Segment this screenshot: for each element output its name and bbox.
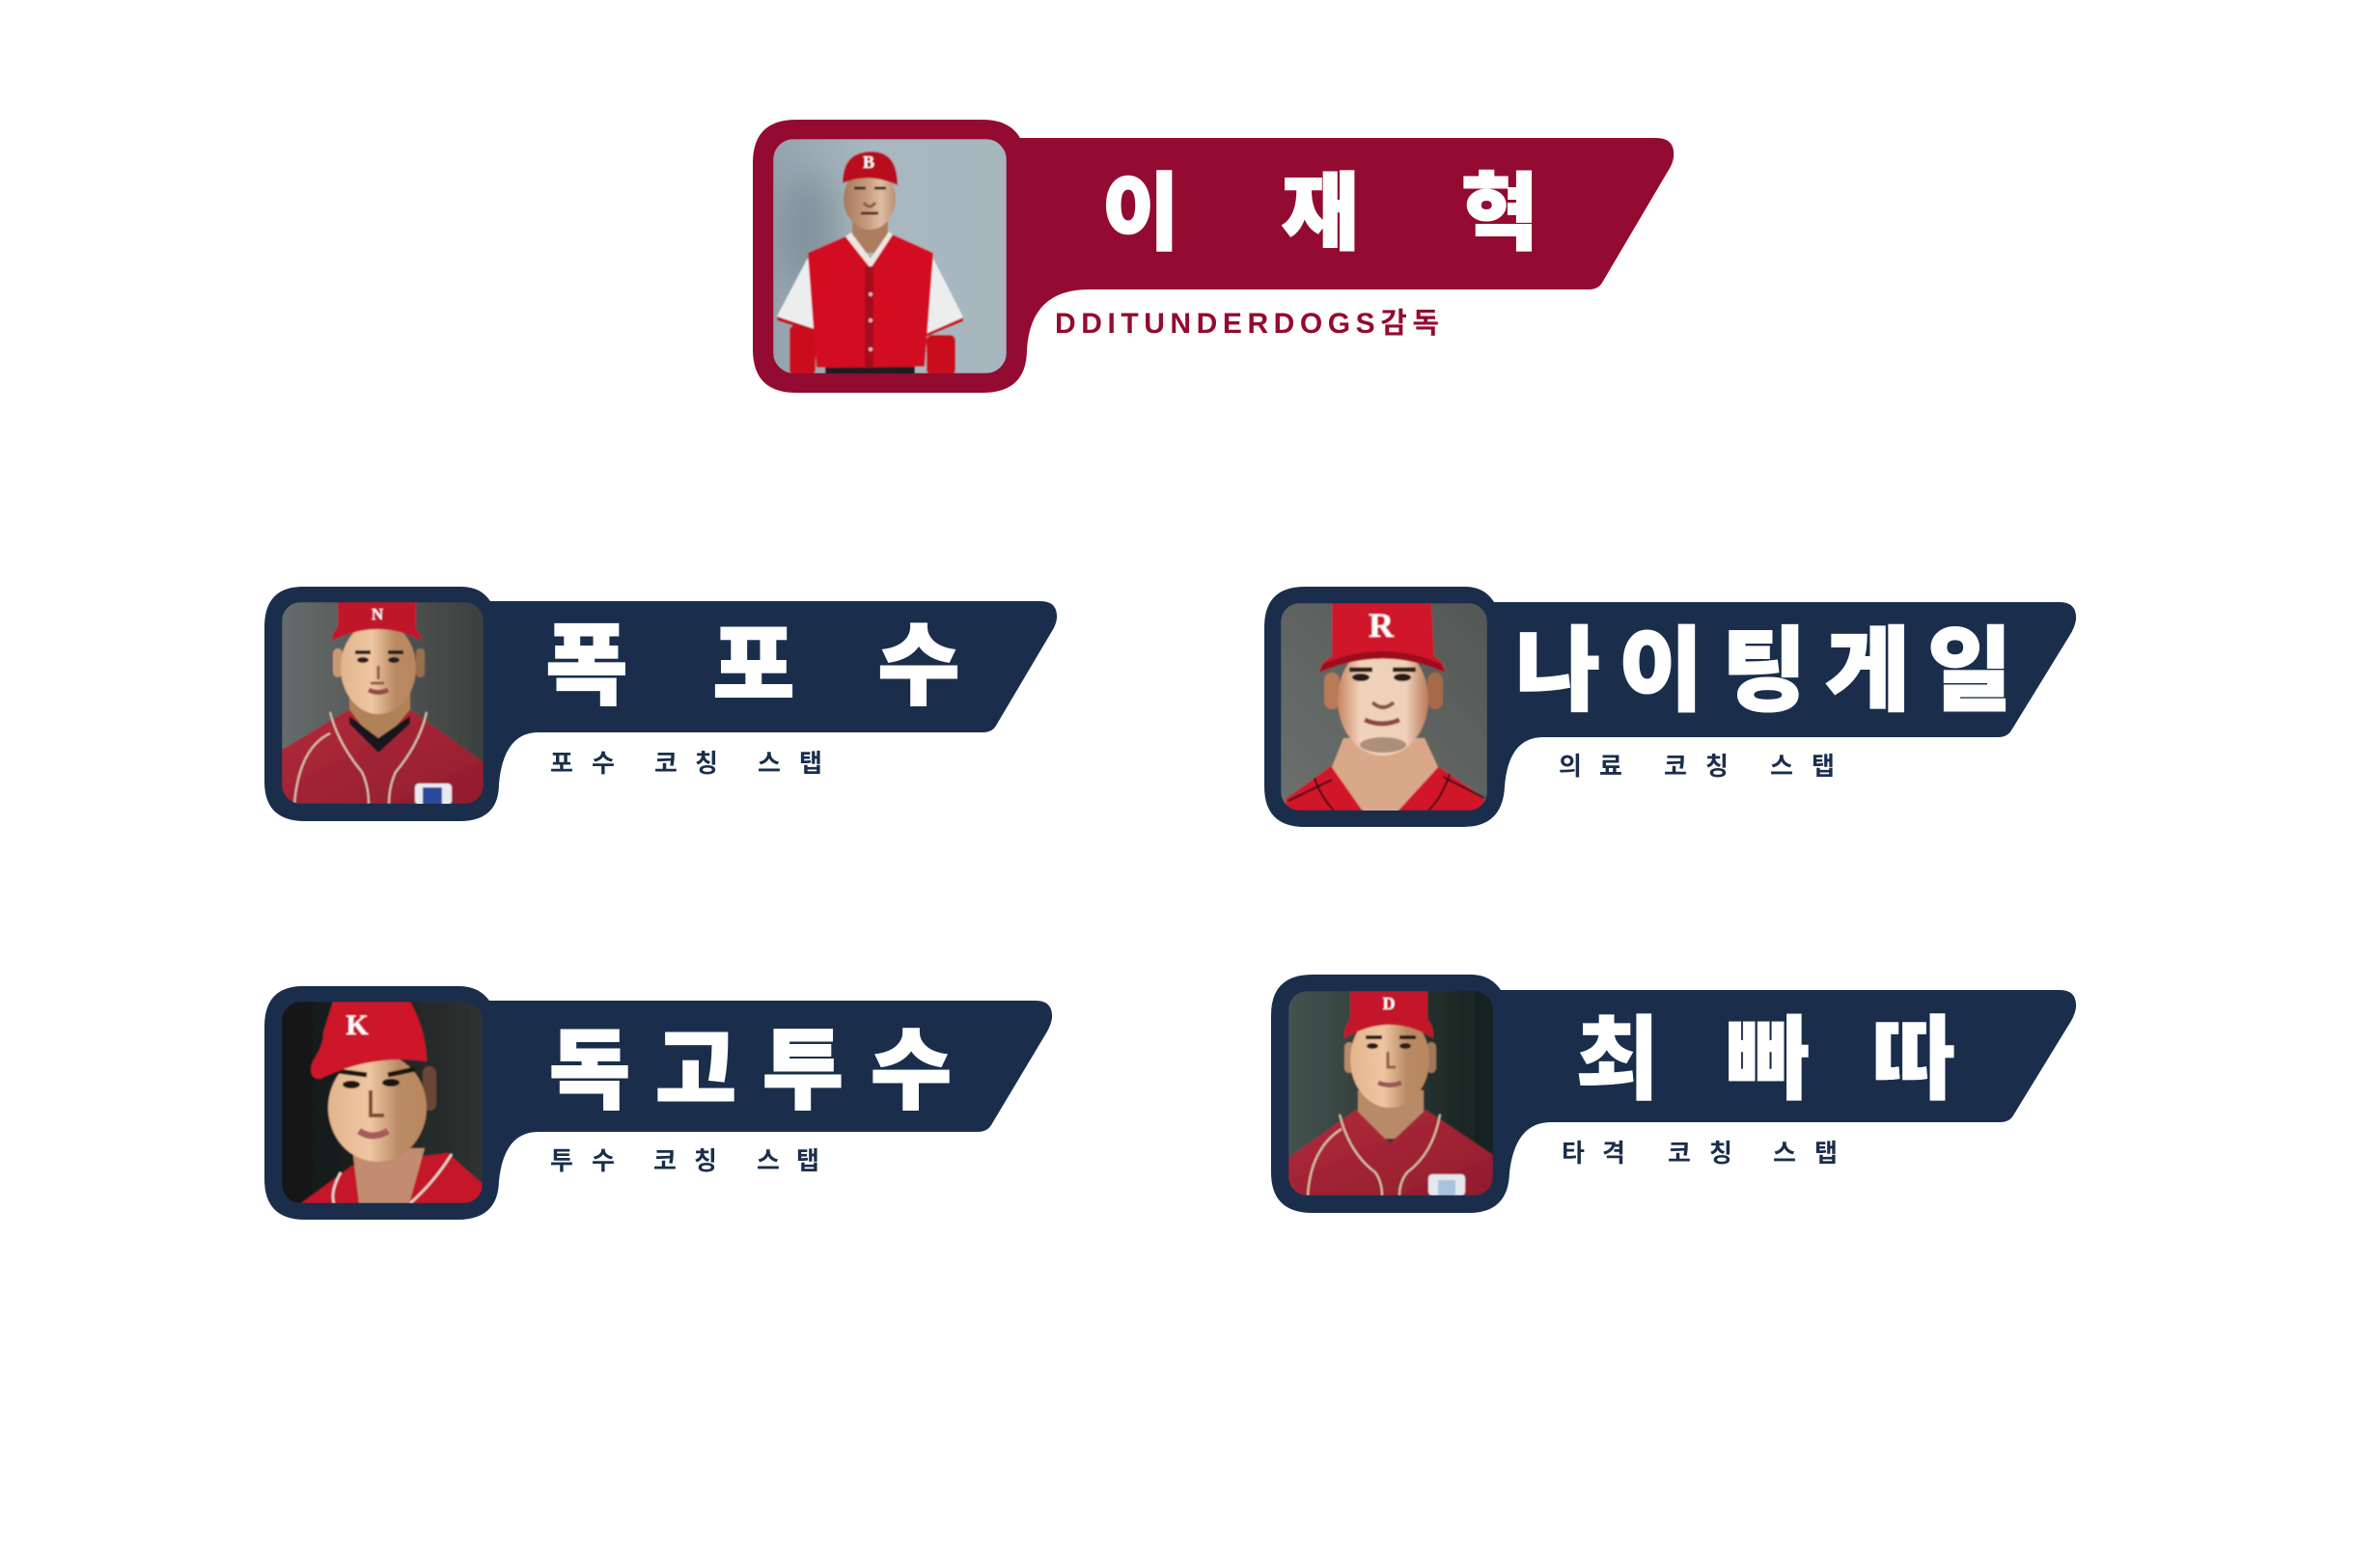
name: 이재혁	[1102, 167, 1538, 261]
photo: medical coach portrait	[1281, 603, 1487, 812]
photo: pitching coach portrait: N	[372, 605, 384, 623]
photo: manager portrait	[773, 139, 1007, 375]
panel: manager card 이재혁	[753, 120, 1674, 393]
name plate shape	[264, 587, 1057, 821]
photo: manager portrait: B	[863, 152, 874, 172]
photo: pitching coach portrait 2	[282, 1002, 483, 1203]
name plate shape	[1271, 975, 2076, 1213]
subtitle: 의료코칭스탭	[1559, 752, 1835, 781]
photo: pitching coach portrait 2: K	[346, 1009, 369, 1041]
subtitle: 타격코칭스탭	[1562, 1139, 1838, 1168]
subtitle: 투수코칭스탭	[550, 1146, 819, 1175]
name: 폭포수	[546, 618, 959, 716]
subtitle: DDITUNDERDOGS감독	[1055, 308, 1439, 340]
panel: coach card 독고투수	[264, 986, 1052, 1220]
subtitle: 포수코칭스탭	[550, 749, 822, 778]
photo: batting coach portrait	[1288, 991, 1493, 1196]
photo: pitching coach portrait	[282, 602, 484, 805]
name: 독고투수	[549, 1023, 952, 1120]
name plate shape	[753, 120, 1674, 393]
panel: coach card 나이팅게일	[1264, 587, 2076, 827]
name plate shape	[264, 986, 1052, 1220]
panel: coach card 폭포수	[264, 587, 1057, 821]
name: 최빠따	[1575, 1009, 1956, 1112]
photo: medical coach portrait: R	[1369, 606, 1395, 645]
name plate shape	[1264, 587, 2076, 827]
panel: coach card 최빠따	[1271, 975, 2076, 1213]
name: 나이팅게일	[1515, 620, 2012, 723]
photo: batting coach portrait: D	[1382, 994, 1396, 1013]
